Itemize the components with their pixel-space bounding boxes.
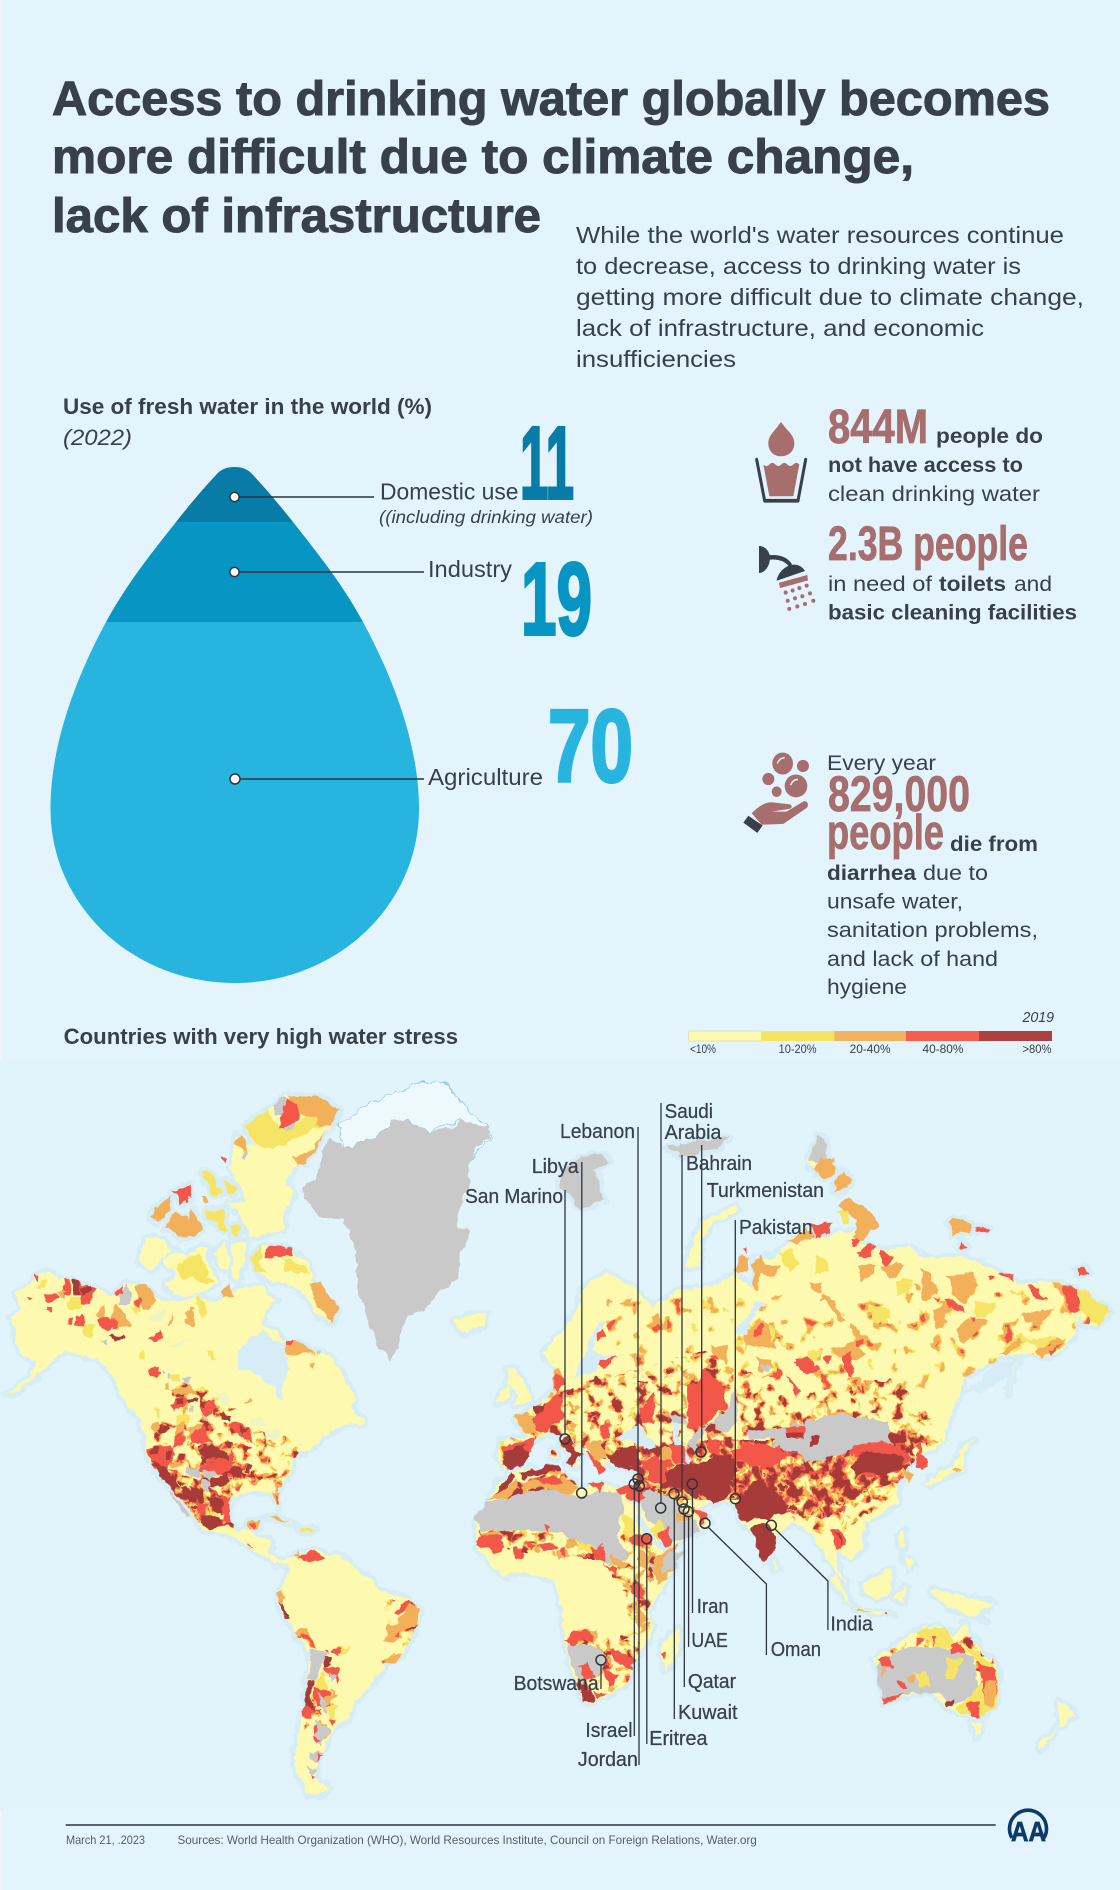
greenland: [150, 1080, 491, 1358]
legend: [689, 1009, 1055, 1089]
intro text block: getting more difficult due to climate change,: [576, 284, 1084, 310]
text: people do not have access: clean drinking water: [828, 483, 1040, 506]
land and water stress areas: [0, 1060, 1120, 1830]
title: more difficult due to climate change,: [52, 131, 914, 184]
icon: glass with water drop: [757, 422, 806, 501]
country labels: Kuwait: [678, 1702, 738, 1724]
text: die from diarrhea: unsafe water,: [827, 891, 963, 914]
country labels: Bahrain: [686, 1153, 752, 1175]
country labels: Pakistan: [739, 1217, 812, 1239]
heading: use of fresh water: Use of fresh water in the world (%): [63, 394, 432, 419]
text: every year: Every year: [827, 752, 936, 775]
title: [52, 73, 1050, 243]
country labels: Lebanon: [560, 1121, 635, 1143]
map background: [0, 1060, 1120, 1810]
eurasia north stress: [560, 1135, 1112, 1450]
country labels: Iran: [697, 1596, 729, 1618]
text: die from diarrhea: [827, 833, 1038, 999]
map: water stress world map: [0, 1060, 1120, 1830]
text: people do not have access: people do: [936, 425, 1043, 448]
year note: (2022): [63, 425, 132, 450]
text: die from diarrhea: diarrhea: [827, 862, 916, 885]
text: die from diarrhea: sanitation problems,: [827, 919, 1038, 942]
country labels: Botswana: [514, 1673, 599, 1695]
country labels: Arabia: [665, 1122, 722, 1144]
label: industry: Industry: [428, 556, 512, 582]
country labels: Israel: [585, 1720, 632, 1742]
eurasia and africa stress: [475, 1315, 860, 1577]
icon: shower: [759, 546, 815, 611]
panel: 844M stat: [757, 401, 1043, 506]
intro text block: [576, 222, 1084, 372]
text: toilets and cleaning: [828, 573, 1077, 625]
icon: hand with bubbles: [743, 753, 809, 833]
callout lines and markers: [560, 1103, 828, 1765]
label: agriculture: Agriculture: [428, 764, 543, 790]
number: 70: 70: [548, 688, 633, 804]
country labels: Saudi: [665, 1101, 713, 1123]
country labels: Turkmenistan: [707, 1180, 824, 1202]
legend: 2019: [1022, 1009, 1055, 1026]
country labels: India: [830, 1614, 874, 1636]
text: toilets and cleaning: in need of: [828, 573, 932, 596]
number: 19: 19: [521, 542, 592, 656]
country labels: Libya: [532, 1156, 580, 1178]
country labels: Qatar: [688, 1671, 736, 1693]
north america stress: [27, 1275, 319, 1530]
country labels: UAE: [691, 1630, 728, 1652]
legend: >80%: [1022, 1042, 1052, 1056]
panel: 829,000 stat: [743, 752, 1038, 999]
intro text block: insufficiencies: [576, 346, 736, 372]
panel: fresh water use: 11: [520, 406, 574, 520]
text: people do not have access: [828, 425, 1043, 506]
value: 844M: 844M: [828, 401, 928, 454]
text: die from diarrhea: hygiene: [827, 976, 907, 999]
footer: [66, 1810, 1046, 1847]
value: 2.3B people: 2.3B people: [828, 518, 1028, 571]
intro text block: lack of infrastructure, and economic: [576, 315, 984, 341]
text: people do not have access: not have access to: [828, 454, 1023, 477]
panel: 2.3B stat: [759, 518, 1077, 625]
text: die from diarrhea: and lack of hand: [827, 948, 998, 971]
mottled stress texture: [151, 1290, 1090, 1740]
country labels: Jordan: [578, 1749, 638, 1771]
legend: 40-80%: [922, 1042, 964, 1056]
text: toilets and cleaning: and: [1014, 573, 1052, 596]
logo: AA: AA: [1011, 1816, 1046, 1847]
legend: 20-40%: [850, 1042, 891, 1056]
sources: Sources: World Health Organization (WHO), World Resources Institute, Council on Foreign Relations, Water.org: [178, 1833, 757, 1847]
date: March 21, .2023: [66, 1833, 145, 1847]
intro text block: While the world's water resources continue: [576, 222, 1064, 248]
value: people: people: [827, 806, 944, 860]
legend: 10-20%: [779, 1042, 817, 1056]
text: toilets and cleaning: basic cleaning facilities: [828, 602, 1077, 625]
title: lack of infrastructure: [52, 190, 541, 243]
legend: <10%: [690, 1042, 716, 1056]
south america stress: [246, 1515, 419, 1778]
country labels: San Marino: [465, 1186, 563, 1208]
text: die from diarrhea: due to: [923, 862, 988, 885]
text: die from diarrhea: die from: [950, 833, 1038, 856]
value: 829,000: 829,000: [828, 766, 970, 822]
panel: fresh water use: [40, 394, 633, 992]
asia east, africa south and oceania stress: [560, 1440, 999, 1718]
country labels: [465, 1101, 874, 1771]
chart: water drop: [40, 460, 430, 992]
heading: countries with very high water stress: Countries with very high water stress: [64, 1024, 458, 1049]
canadian arctic stress: [150, 1095, 339, 1355]
country labels: Eritrea: [649, 1728, 708, 1750]
intro text block: to decrease, access to drinking water is: [576, 253, 1021, 279]
country labels: Oman: [771, 1639, 821, 1661]
legend: Drought and low water use: [934, 1078, 1050, 1089]
title: Access to drinking water globally becomes: [52, 73, 1050, 126]
note: including drinking water: ((including drinking water): [379, 507, 593, 527]
text: toilets and cleaning: toilets: [939, 573, 1006, 596]
inland seas: [150, 1302, 1021, 1468]
label: domestic use: Domestic use: [380, 479, 518, 505]
